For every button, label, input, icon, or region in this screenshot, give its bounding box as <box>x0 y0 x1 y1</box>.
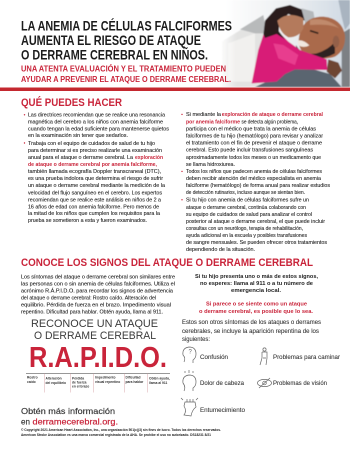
text block: symptoms intro: las personas con o sin anemia de células falciformes. Utiliza el <box>21 282 175 288</box>
acronym legend table: llama al 911 <box>149 381 167 385</box>
symptom: numbness <box>181 398 245 416</box>
text block: right column bullets: consultas con un neurólogo, terapia de rehabilitación, <box>186 226 303 232</box>
text block: symptoms intro: equilibrio. Pérdida de fuerza en el brazo. Impedimento visual <box>21 303 171 309</box>
callout: call 911: Si tu hijo presenta uno o más de estos signos, <box>195 274 318 280</box>
acronym legend table: Rostro <box>27 376 38 380</box>
title: O DERRAME CEREBRAL EN NIÑOS. <box>21 46 208 62</box>
text block: right column bullets: se llama hidroxiurea. <box>186 162 235 168</box>
symptom: numbness: Entumecimiento <box>200 407 245 414</box>
red divider band <box>0 88 350 91</box>
text block: right column bullets: aproximadamente todos los meses o un medicamento que <box>186 155 321 161</box>
acronym legend table <box>26 373 170 392</box>
more information link: derramecerebral.org. <box>32 416 118 426</box>
text block: right column bullets: deben recibir atención del médico especialista en anemia <box>186 176 322 182</box>
house <box>222 16 263 87</box>
copyright <box>21 428 221 437</box>
man head <box>299 17 345 59</box>
text block: right column bullets: dependiendo de la situación. <box>186 247 255 253</box>
more information link: Obtén más información <box>21 406 115 416</box>
text block: right column bullets <box>181 112 330 253</box>
subtitle: UNA ATENTA EVALUACIÓN Y EL TRATAMIENTO PUEDEN <box>21 64 226 74</box>
text block: left column bullets: de ataque o derrame cerebral por anemia falciforme, <box>28 162 157 168</box>
text block: left column bullets: un ataque o derrame cerebral mediante la medición de la <box>28 183 166 189</box>
text block: symptoms intro: acrónimo R.Á.P.I.D.O. para recordar los signos de advertencia <box>21 288 174 295</box>
acronym legend table: visual repentino <box>95 380 120 384</box>
copyright: American Stroke Association es una marca comercial registrada de la AHA. Se prohíbe el uso no autorizado. DS18231 8/21 <box>21 433 211 437</box>
acronym legend table: Alteración <box>46 376 62 380</box>
symptom: trouble walking: Problemas para caminar <box>273 354 341 361</box>
callout: red warning: Si parece o se siente como un ataque <box>206 302 307 308</box>
text block: right column bullets: posterior al ataque o derrame cerebral, el que puede incluir <box>186 219 325 225</box>
acronym legend table: del equilibrio <box>46 381 66 385</box>
text block: other symptoms <box>182 319 321 343</box>
text block: left column bullets: para determinar si es preciso realizarle una examinación <box>28 148 162 154</box>
symptom: confusion: Confusión <box>200 354 228 361</box>
text block: left column bullets: prueba se sometieron a esta y fueron examinados. <box>28 218 147 224</box>
symptom: headache: Dolor de cabeza <box>200 380 244 387</box>
acronym legend table: para hablar <box>126 380 144 384</box>
more information link <box>21 406 118 426</box>
text block: left column bullets: Trabaja con el equipo de cuidados de salud de tu hijo <box>28 141 155 147</box>
more information link: en <box>21 416 30 426</box>
text block: symptoms intro <box>21 275 175 316</box>
text block: other symptoms: siguientes: <box>182 336 210 343</box>
text block: symptoms intro: Los síntomas del ataque o derrame cerebral son similares entre <box>21 275 175 281</box>
callout: call 911: no esperes: llama al 911 o a tu número de <box>200 281 313 287</box>
heading: que puedes hacer: QUÉ PUEDES HACER <box>21 96 122 109</box>
text block: right column bullets: ataque o derrame cerebral, continúa colaborando con <box>186 205 306 211</box>
callout: reconoce un ataque <box>31 318 158 342</box>
acronym legend table: Obtén ayuda, <box>149 376 170 380</box>
symptom: trouble walking <box>260 348 341 365</box>
text block: left column bullets: en la examinación sin tener que sedarlos. <box>28 133 128 139</box>
callout: call 911: emergencia local. <box>231 288 281 294</box>
girl jacket <box>252 32 327 83</box>
text block: right column bullets: Si tu hijo con anemia de células falciformes sufre un <box>186 198 309 204</box>
callout: red warning <box>199 302 313 315</box>
acronym legend table: Impedimento <box>95 376 116 380</box>
text block: left column bullets: es una prueba indolora que determina el riesgo de sufrir <box>28 176 163 182</box>
man hand <box>327 59 342 78</box>
text block: right column bullets: Todos los niños que padecen anemia de células falciformes <box>186 169 322 175</box>
text block: left column bullets: recomiendan que se realice este análisis en niños de 2 a <box>28 198 162 204</box>
text block: left column bullets: también llamada ecografía Doppler transcraneal (DTC), <box>28 169 161 175</box>
subtitle: AYUDAR A PREVENIR EL ATAQUE O DERRAME CEREBRAL. <box>21 75 231 84</box>
symptom: vision problems: Problemas de visión <box>273 380 327 387</box>
text block: symptoms intro: del ataque o derrame cerebral: Rostro caído. Alteración del <box>21 296 156 302</box>
text block: left column bullets <box>24 113 169 224</box>
acronym legend table: de fuerza <box>72 380 87 384</box>
text block: right column bullets: ayuda adicional en la escuela y posibles transfusiones <box>186 233 307 239</box>
girl hair <box>263 5 305 35</box>
acronym: R.A.P.I.D.O.: R.A.P.I.D.O. <box>29 342 167 374</box>
text block: left column bullets: 16 años de edad con anemia falciforme. Pero menos de <box>28 205 159 211</box>
text block: symptoms intro: repentino. Dificultad para hablar. Obtén ayuda, llama al 911. <box>21 310 163 316</box>
text block: left column bullets: magnética del cerebro a los niños con anemia falciforme <box>28 120 163 126</box>
title: LA ANEMIA DE CÉLULAS FALCIFORMES <box>21 18 232 34</box>
symptom: vision problems <box>258 378 327 388</box>
symptom: confusion <box>183 347 228 363</box>
text block: left column bullets: velocidad del flujo sanguíneo en el cerebro. Los expertos <box>28 191 162 197</box>
text block: left column bullets: anual para el ataque o derrame cerebral. La <box>28 155 134 161</box>
text block: right column bullets: participa con el médico que trata la anemia de células <box>186 127 316 133</box>
text block: right column bullets: de sangre mensuales. Se pueden ofrecer otros tratamientos <box>186 240 327 246</box>
text block: right column bullets: su equipo de cuidados de salud para analizar el control <box>186 212 312 218</box>
callout: call 911 <box>195 274 318 294</box>
girl face <box>277 15 303 37</box>
callout: red warning: o derrame cerebral, es posible que lo sea. <box>199 309 313 315</box>
text block: left column bullets: cuando tengan la edad suficiente para mantenerse quietos <box>28 127 169 133</box>
text block: right column bullets: exploración de ataque o derrame cerebral <box>222 112 323 118</box>
subtitle <box>21 64 231 84</box>
copyright: © Copyright 2021 American Heart Association, Inc., una organización 501(c)(3) sin fines de lucro. Todos los derechos reservados. <box>21 428 221 432</box>
text block: right column bullets: cerebral. Esto puede incluir transfusiones sanguíneas <box>186 148 313 154</box>
text block: left column bullets: exploración <box>135 155 164 161</box>
acronym legend table: Dificultad <box>126 376 141 380</box>
text block: other symptoms: cerebrales, se incluye la aparición repentina de los <box>182 328 319 335</box>
text block: right column bullets: por anemia falciforme <box>186 120 240 126</box>
symptom: confusion: ? <box>188 350 192 356</box>
text block: left column bullets: Las directrices recomiendan que se realice una resonancia <box>28 113 166 119</box>
callout: reconoce un ataque: O DERRAME CEREBRAL <box>34 330 156 342</box>
photo: father hugging daughter <box>220 0 350 87</box>
text block: right column bullets: de detección rutinarios, incluso aunque se sientan bien. <box>186 190 305 196</box>
callout: reconoce un ataque: RECONOCE UN ATAQUE <box>31 318 158 330</box>
text block: right column bullets: falciformes de tu hijo (hematólogo) para revisar y analizar <box>186 134 323 140</box>
acronym legend table: caído <box>27 380 36 384</box>
heading: conoce los signos: CONOCE LOS SIGNOS DEL ATAQUE O DERRAME CEREBRAL <box>21 257 313 269</box>
text block: other symptoms: Estos son otros síntomas de los ataques o derrames <box>182 319 321 326</box>
acronym legend table: Pérdida <box>72 376 84 380</box>
acronym legend table: en el brazo <box>72 384 89 388</box>
text block: left column bullets: la mitad de los niños que cumplen los requisitos para la <box>28 211 161 217</box>
title: AUMENTA EL RIESGO DE ATAQUE <box>21 32 201 48</box>
title <box>21 18 232 62</box>
text block: right column bullets: falciforme (hematólogo) de forma anual para realizar estudios <box>186 183 330 189</box>
man sweater <box>255 68 342 87</box>
text block: right column bullets: se detecta algún problema, <box>242 120 298 126</box>
text block: right column bullets: Si mediante la <box>186 112 222 118</box>
text block: right column bullets: el tratamiento con el fin de prevenir el ataque o derrame <box>186 141 322 147</box>
symptom: headache <box>183 370 244 391</box>
